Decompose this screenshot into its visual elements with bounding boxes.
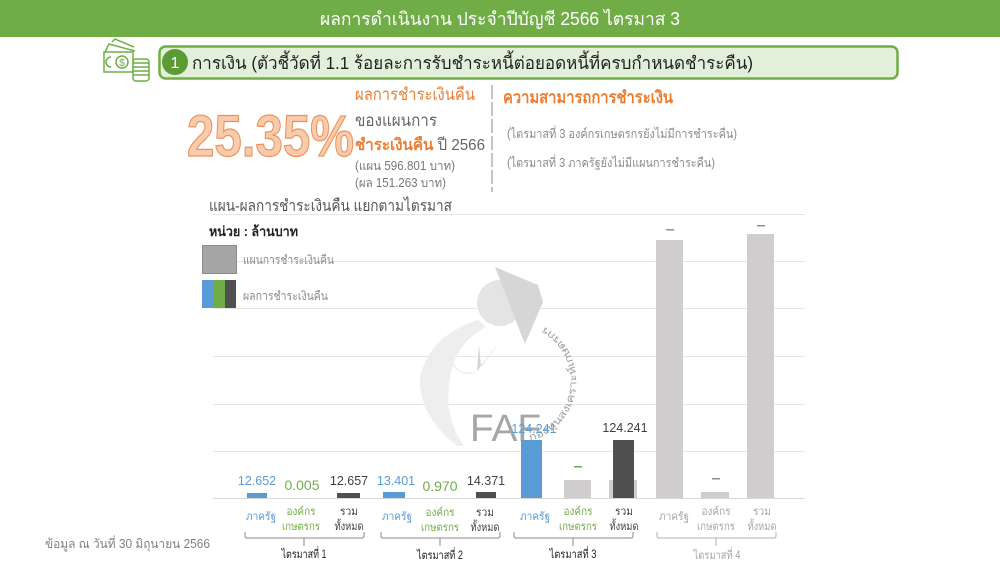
quarter labels: ไตรมาสที่ 1 bbox=[281, 546, 326, 561]
category labels: ภาครัฐ bbox=[382, 511, 412, 523]
category labels: ทั้งหมด bbox=[470, 519, 500, 534]
section heading bar: การเงิน (ตัวชี้วัดที่ 1.1 ร้อยละการรับชำระหนี้ต่อยอดหนี้ที่ครบกำหนดชำระคืน) bbox=[192, 50, 753, 73]
category labels: องค์กร bbox=[286, 505, 316, 518]
section heading bar bbox=[160, 46, 898, 78]
value labels: 12.657 bbox=[330, 474, 368, 488]
category labels: ทั้งหมด bbox=[610, 518, 638, 533]
category labels: รวม bbox=[615, 506, 633, 518]
big percentage: 25.35% bbox=[187, 104, 354, 169]
quarter labels bbox=[281, 546, 741, 562]
category labels: ภาครัฐ bbox=[520, 511, 550, 523]
value labels: 124.241 bbox=[511, 422, 557, 436]
repayment result text block: ผลการชำระเงินคืน bbox=[355, 85, 475, 104]
category labels bbox=[246, 505, 776, 534]
watermark logo: FAF bbox=[470, 408, 541, 450]
quarter labels: ไตรมาสที่ 3 bbox=[549, 546, 596, 561]
legend: แผนการชำระเงินคืน bbox=[243, 253, 334, 267]
value labels bbox=[238, 225, 765, 494]
watermark logo bbox=[420, 267, 576, 450]
category labels: รวม bbox=[340, 506, 358, 518]
chart bbox=[238, 225, 776, 562]
plan bars bbox=[564, 234, 774, 498]
category labels: ทั้งหมด bbox=[748, 518, 776, 533]
category labels: เกษตรกร bbox=[282, 521, 320, 533]
chart heading: แผน-ผลการชำระเงินคืน แยกตามไตรมาส bbox=[209, 196, 452, 215]
legend: ผลการชำระเงินคืน bbox=[243, 289, 328, 303]
repayment result text block: (แผน 596.801 บาท) bbox=[355, 159, 455, 173]
category labels: ทั้งหมด bbox=[334, 518, 364, 533]
category labels: ภาครัฐ bbox=[659, 511, 689, 523]
value labels: 12.652 bbox=[238, 474, 276, 488]
icon: money and coins bbox=[104, 39, 149, 81]
value labels: 124.241 bbox=[602, 421, 648, 435]
quarter labels: ไตรมาสที่ 2 bbox=[416, 547, 463, 562]
category labels: เกษตรกร bbox=[697, 521, 735, 533]
repayment result text block bbox=[355, 85, 485, 190]
category labels: ภาครัฐ bbox=[246, 511, 276, 523]
legend bbox=[202, 246, 334, 308]
category labels: เกษตรกร bbox=[421, 522, 459, 534]
category labels: เกษตรกร bbox=[559, 521, 597, 533]
chart grid bbox=[213, 214, 805, 498]
category labels: องค์กร bbox=[702, 505, 731, 518]
icon: money and coins: $ bbox=[119, 58, 125, 69]
category labels: รวม bbox=[476, 507, 494, 519]
value labels: 13.401 bbox=[377, 474, 415, 488]
quarter labels: ไตรมาสที่ 4 bbox=[693, 547, 741, 562]
repayment result text block: ของแผนการ bbox=[355, 111, 437, 130]
repayment capacity text block bbox=[503, 88, 737, 170]
repayment result text block: (ผล 151.263 บาท) bbox=[355, 176, 446, 190]
value labels: 0.005 bbox=[284, 477, 320, 493]
watermark logo: กองทุนสงเคราะห์เกษตรกร bbox=[530, 328, 576, 440]
value labels: 0.970 bbox=[422, 478, 458, 494]
number badge bbox=[162, 49, 188, 75]
category labels: รวม bbox=[753, 506, 771, 518]
result bars bbox=[247, 440, 634, 498]
title banner bbox=[0, 0, 1000, 37]
value labels: 14.371 bbox=[467, 474, 505, 488]
repayment result text block: ชำระเงินคืน ปี 2566 bbox=[355, 136, 485, 154]
repayment capacity text block: (ไตรมาสที่ 3 ภาครัฐยังไม่มีแผนการชำระคืน) bbox=[507, 154, 715, 170]
quarter brackets bbox=[245, 532, 776, 546]
unit label: หน่วย : ล้านบาท bbox=[209, 224, 298, 239]
repayment capacity text block: ความสามารถการชำระเงิน bbox=[503, 88, 673, 107]
category labels: องค์กร bbox=[564, 505, 593, 518]
repayment capacity text block: (ไตรมาสที่ 3 องค์กรเกษตรกรยังไม่มีการชำระคืน) bbox=[507, 125, 737, 141]
data date note: ข้อมูล ณ วันที่ 30 มิถุนายน 2566 bbox=[45, 535, 210, 552]
number badge: 1 bbox=[171, 55, 180, 72]
title banner: ผลการดำเนินงาน ประจำปีบัญชี 2566 ไตรมาส 3 bbox=[320, 8, 680, 29]
category labels: องค์กร bbox=[426, 506, 455, 519]
